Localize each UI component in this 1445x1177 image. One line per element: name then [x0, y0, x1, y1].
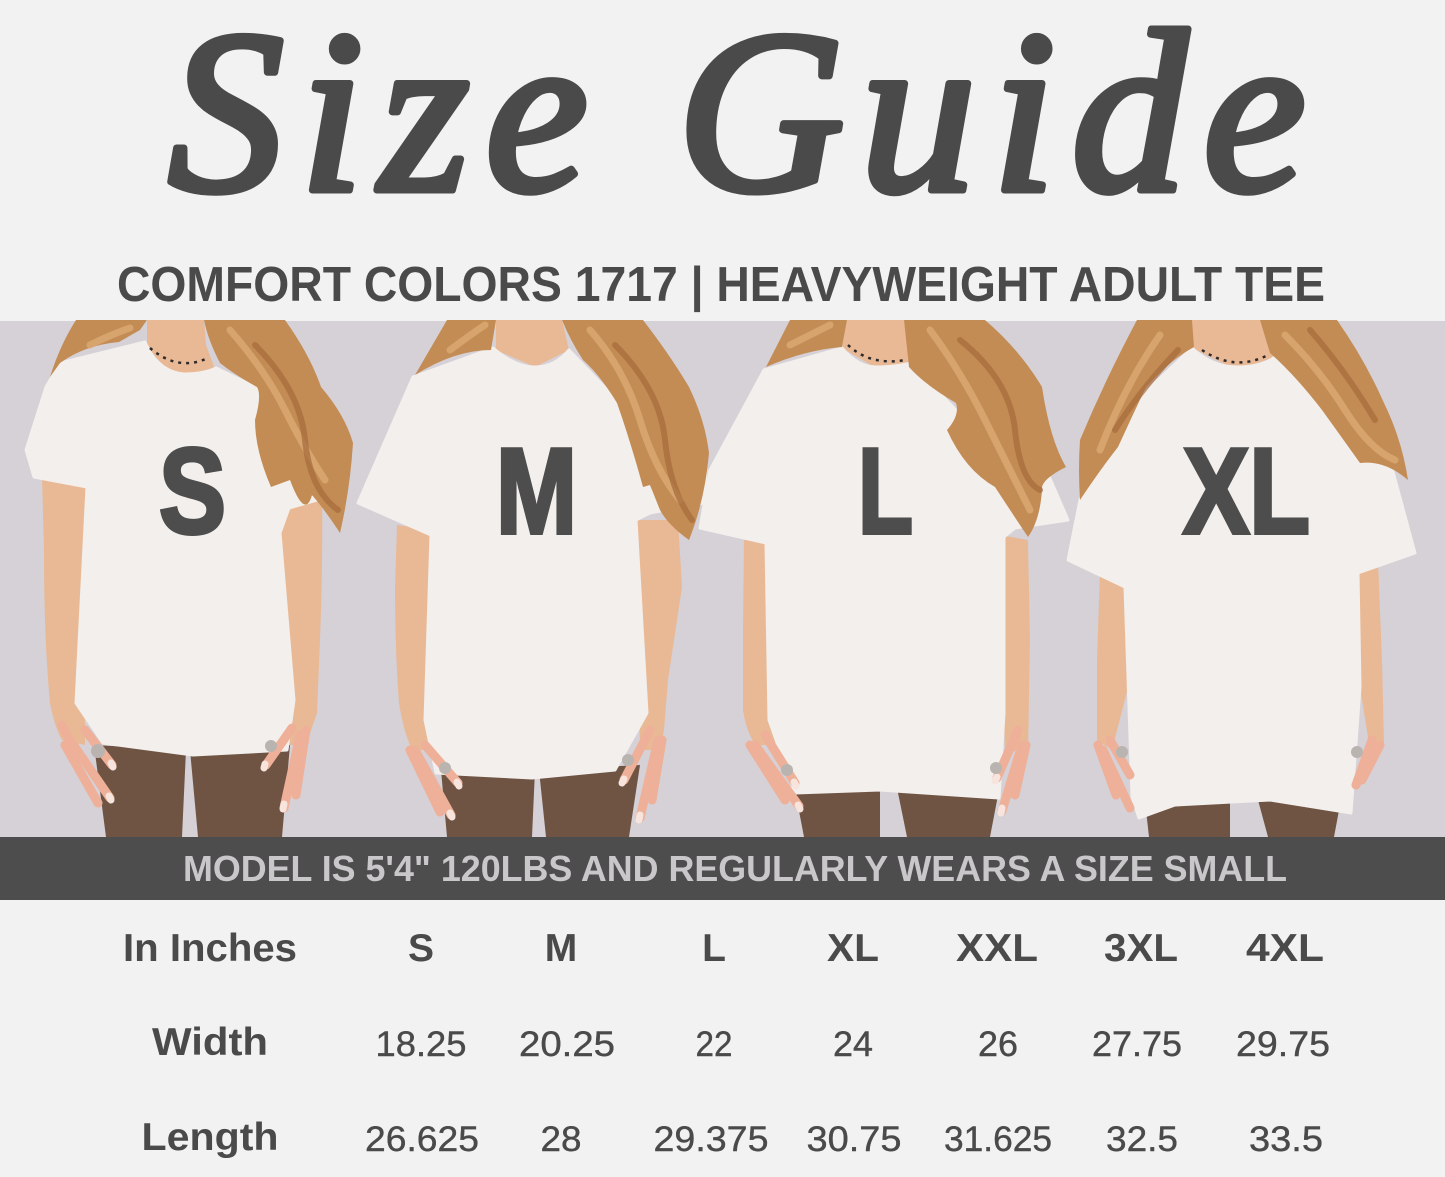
subtitle: COMFORT COLORS 1717 | HEAVYWEIGHT ADULT TEE: [117, 258, 1325, 312]
model: size XL: XL: [1183, 423, 1310, 559]
model note banner: MODEL IS 5'4" 120LBS AND REGULARLY WEARS A SIZE SMALL: [183, 848, 1287, 889]
model: size L: [700, 320, 1068, 837]
size table header row: In Inches: [123, 927, 297, 970]
length row: [142, 1116, 1323, 1159]
width row: Width: [152, 1021, 268, 1064]
size table header row: 4XL: [1246, 927, 1324, 970]
size table header row: S: [408, 927, 434, 970]
length row: 33.5: [1249, 1120, 1323, 1159]
size table header row: XXL: [956, 927, 1038, 970]
length row: 28: [540, 1120, 582, 1159]
width row: 22: [696, 1025, 732, 1064]
size table header row: XL: [827, 927, 879, 970]
model: size XL: [1068, 320, 1415, 837]
size table header row: 3XL: [1104, 927, 1178, 970]
width row: 27.75: [1092, 1025, 1182, 1064]
model: size S: [26, 320, 353, 837]
width row: 20.25: [519, 1025, 615, 1064]
length row: 32.5: [1106, 1120, 1178, 1159]
model: size L: L: [858, 423, 913, 559]
width row: [152, 1021, 1330, 1064]
length row: 31.625: [944, 1120, 1052, 1159]
length row: 29.375: [654, 1120, 768, 1159]
length row: Length: [142, 1116, 278, 1159]
size table header row: M: [545, 927, 577, 970]
width row: 24: [833, 1025, 873, 1064]
size table header row: [123, 927, 1324, 970]
model note banner: [0, 837, 1445, 900]
width row: 29.75: [1236, 1025, 1330, 1064]
width row: 26: [978, 1025, 1018, 1064]
model: size M: [358, 320, 709, 837]
size table header row: L: [702, 927, 726, 970]
length row: 26.625: [365, 1120, 479, 1159]
length row: 30.75: [806, 1120, 902, 1159]
model: size S: S: [159, 423, 226, 559]
photo band: [0, 321, 1445, 837]
model: size M: M: [496, 423, 577, 559]
width row: 18.25: [376, 1025, 466, 1064]
